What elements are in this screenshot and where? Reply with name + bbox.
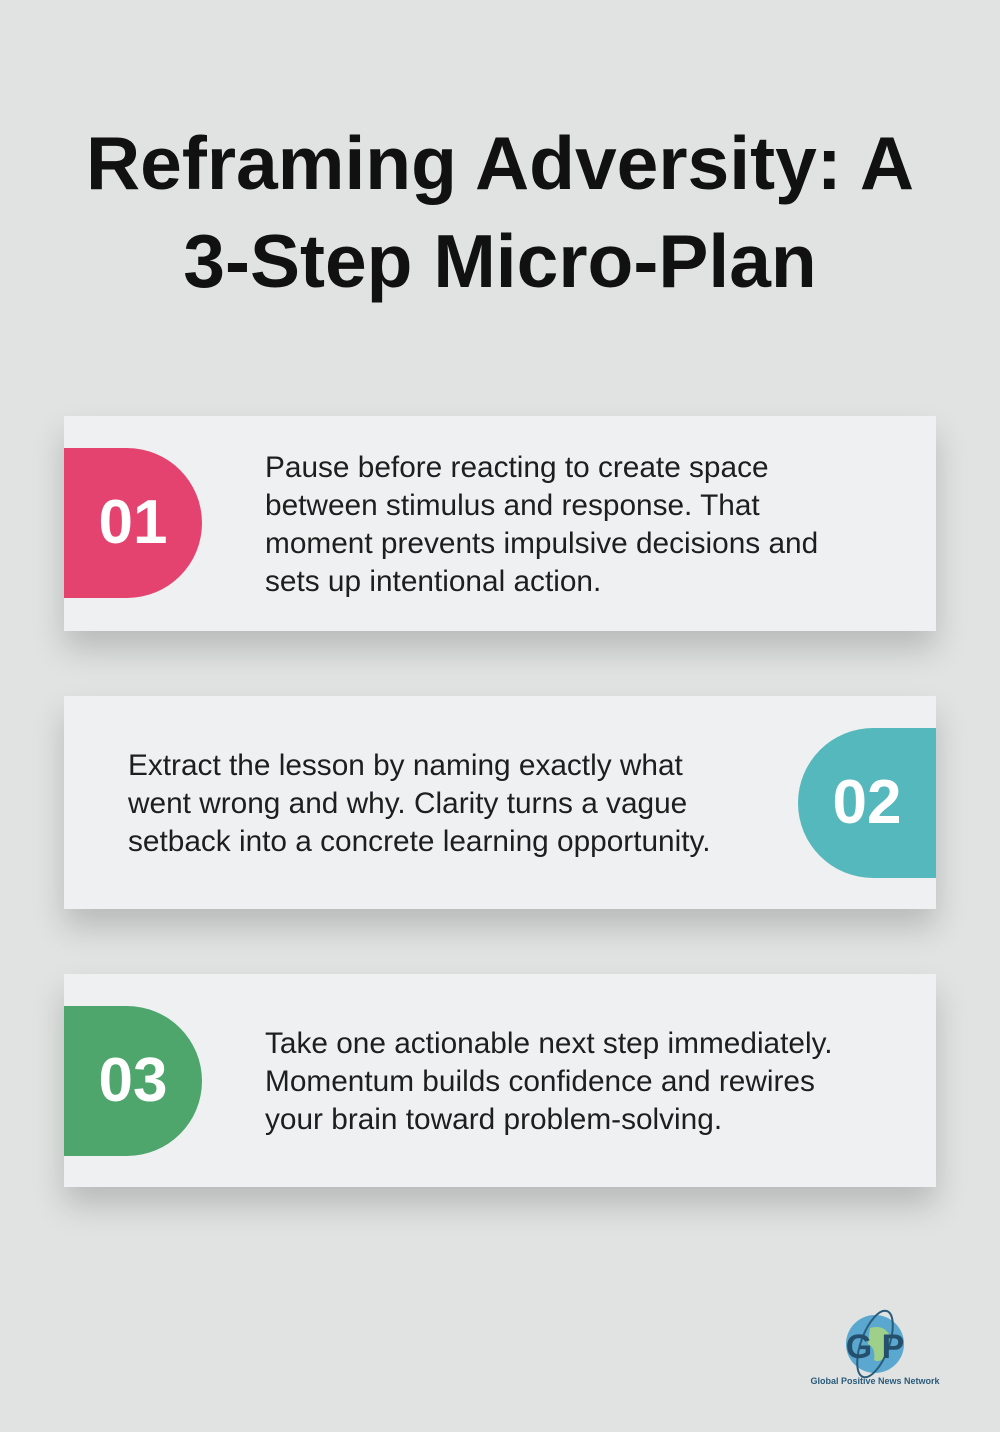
text step 1	[265, 451, 818, 598]
badge 03: 03	[99, 1046, 167, 1115]
badge 02	[798, 728, 936, 878]
panel: step 2	[64, 696, 936, 909]
panel: step 1	[64, 416, 936, 631]
text step 3: Take one actionable next step immediately.	[265, 1027, 833, 1060]
title: 3-Step Micro-Plan	[183, 219, 817, 303]
text step 1: moment prevents impulsive decisions and	[265, 527, 818, 560]
text step 3: Momentum builds confidence and rewires	[265, 1065, 815, 1098]
title	[86, 121, 914, 303]
text step 2: went wrong and why. Clarity turns a vague	[128, 787, 687, 820]
logo	[810, 1310, 940, 1386]
text step 3	[265, 1027, 833, 1136]
text step 1: Pause before reacting to create space	[265, 451, 769, 484]
badge 02: 02	[833, 768, 901, 837]
text step 1: sets up intentional action.	[265, 565, 601, 598]
text step 3: your brain toward problem-solving.	[265, 1103, 722, 1136]
text step 2: setback into a concrete learning opportunity.	[128, 825, 710, 858]
text step 1: between stimulus and response. That	[265, 489, 760, 522]
badge 01: 01	[99, 488, 167, 557]
text step 2: Extract the lesson by naming exactly what	[128, 749, 683, 782]
badge 03	[64, 1006, 202, 1156]
text step 2	[128, 749, 710, 858]
panel: step 3	[64, 974, 936, 1187]
badge 01	[64, 448, 202, 598]
logo: G P	[846, 1328, 904, 1366]
title: Reframing Adversity: A	[86, 121, 914, 205]
logo: Global Positive News Network	[810, 1376, 940, 1386]
